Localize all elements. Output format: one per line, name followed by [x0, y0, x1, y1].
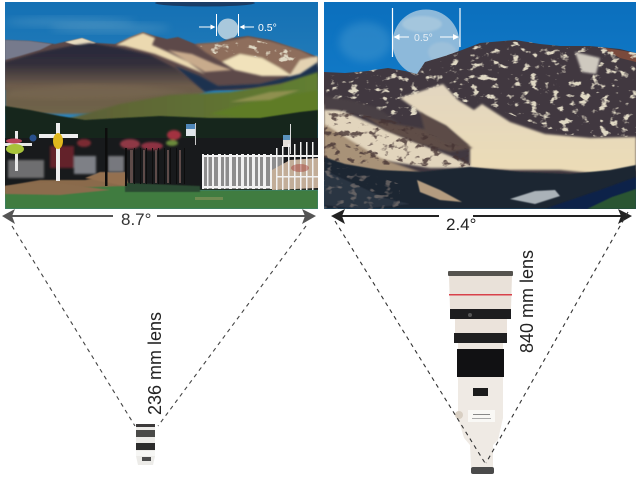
moon width marker 0.5° on wide photo	[199, 14, 277, 36]
rock speckle on lit peak	[200, 40, 296, 62]
moon width marker 0.5° on telephoto photo	[392, 8, 460, 57]
tree line	[5, 106, 318, 138]
cemetery ground	[5, 138, 318, 190]
moon	[218, 18, 238, 40]
icon: small 236 mm lens	[136, 424, 155, 465]
dark cloud	[155, 2, 255, 6]
arrow: 8.7° field of view width: 8.7°	[121, 210, 151, 229]
blue and white flags	[186, 129, 195, 136]
shaded mountain	[5, 43, 206, 114]
arrow: 2.4° field of view width	[331, 209, 632, 234]
moon width marker 0.5° on telephoto photo: 0.5°	[414, 32, 433, 44]
rock bands between snow	[367, 118, 474, 152]
arrow: 2.4° field of view width: 2.4°	[446, 215, 476, 234]
label: 840 mm lens: 840 mm lens	[517, 250, 537, 353]
white picket fence	[202, 155, 282, 189]
mountain massif	[324, 40, 636, 180]
panel: telephoto 840 mm photo of moon behind snowy mountain	[324, 2, 636, 209]
lower snow fan	[400, 84, 636, 174]
dashed angle lines for 236 mm lens	[12, 226, 306, 426]
icon: large 840 mm lens	[448, 271, 513, 474]
arrow: 8.7° field of view width	[2, 209, 316, 229]
upper face snow speckle	[324, 40, 636, 140]
large moon	[392, 10, 460, 76]
dark forest foreground	[324, 157, 636, 209]
label: 236 mm lens: 236 mm lens	[145, 312, 165, 415]
main white cross	[56, 123, 60, 181]
rock speckle on left snow slope	[324, 108, 470, 168]
sunlit snow on peaks	[116, 33, 318, 78]
green foothills	[70, 72, 318, 124]
panel: wide 236 mm photo of moon above mountains and cemetery	[5, 0, 318, 209]
far mountain ridge	[5, 32, 318, 90]
dashed angle lines for 840 mm lens	[335, 212, 628, 463]
black fence posts	[105, 128, 185, 186]
greyed grave clutter	[8, 130, 181, 178]
moon width marker 0.5° on wide photo: 0.5°	[258, 22, 277, 34]
left cross with flowers	[15, 131, 18, 171]
